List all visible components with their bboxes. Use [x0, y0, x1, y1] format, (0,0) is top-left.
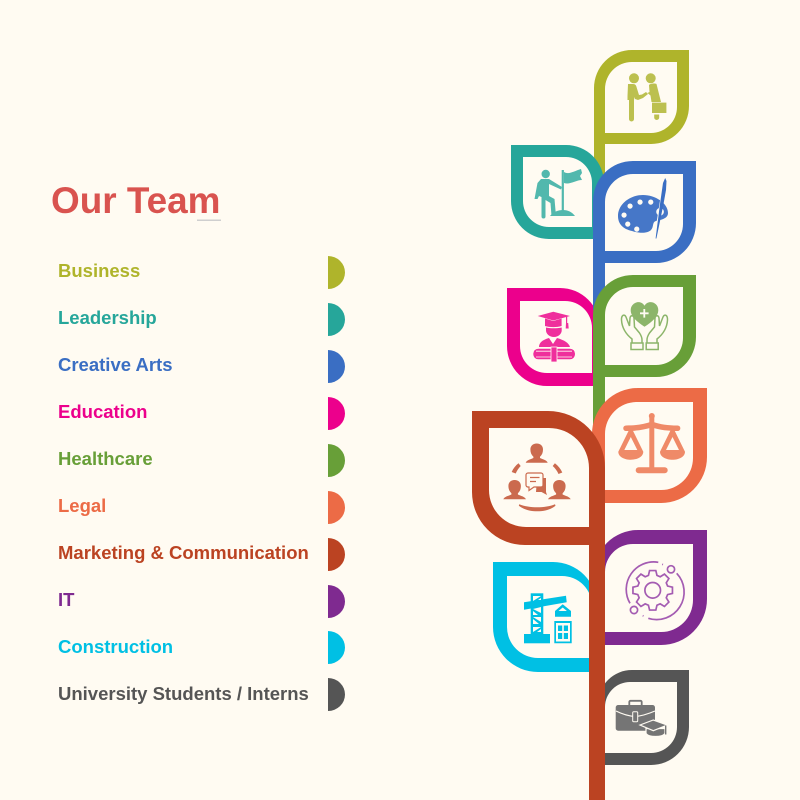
- legend list: [58, 256, 345, 711]
- icon: scales of justice: [618, 413, 685, 473]
- leaf: Legal: [592, 388, 707, 503]
- icon: person with flag: [534, 169, 582, 218]
- legend: Marketing & Communication: [58, 538, 345, 571]
- legend: Healthcare: [58, 444, 345, 477]
- legend: Business: [58, 256, 345, 289]
- legend: Leadership: [58, 303, 345, 336]
- legend: Legal: [58, 491, 345, 524]
- legend: Construction: [58, 631, 345, 664]
- legend: University Students / Interns: [58, 678, 345, 711]
- leaf: Education: [507, 288, 600, 386]
- icon: crane and building: [524, 593, 572, 643]
- tree of leaves: [472, 50, 707, 800]
- leaf: Construction: [493, 562, 597, 672]
- leaf: Leadership: [511, 145, 604, 239]
- leaf: University Students / Interns: [598, 670, 689, 765]
- icon: gear with orbit: [626, 562, 684, 620]
- leaf: Business: [594, 50, 689, 175]
- leaf: Healthcare: [593, 275, 696, 430]
- legend: Education: Education: [58, 401, 147, 422]
- legend: Construction: Construction: [58, 636, 173, 657]
- title: Our Team: [51, 180, 220, 221]
- leaf: IT: [594, 530, 707, 645]
- legend: Marketing & Communication: Marketing & Communication: [58, 542, 309, 563]
- leaf and trunk: Marketing & Communication: [472, 411, 605, 800]
- icon: graduate with scroll: [533, 312, 575, 362]
- legend: IT: IT: [58, 589, 75, 610]
- legend: Creative Arts: [58, 350, 345, 383]
- legend: Leadership: Leadership: [58, 307, 157, 328]
- icon: paint palette: [618, 178, 668, 238]
- icon: heart in caring hands: [621, 302, 668, 350]
- leaf: Creative Arts: [593, 161, 696, 310]
- legend: Healthcare: Healthcare: [58, 448, 153, 469]
- legend: Education: [58, 397, 345, 430]
- legend: Creative Arts: Creative Arts: [58, 354, 172, 375]
- legend: IT: [58, 585, 345, 618]
- legend: Legal: Legal: [58, 495, 106, 516]
- legend: Business: Business: [58, 260, 140, 281]
- icon: handshake: [628, 73, 667, 122]
- icon: briefcase with graduation cap: [616, 701, 667, 736]
- legend: University Students / Interns: University Students / Interns: [58, 683, 309, 704]
- icon: team communication: [503, 444, 571, 511]
